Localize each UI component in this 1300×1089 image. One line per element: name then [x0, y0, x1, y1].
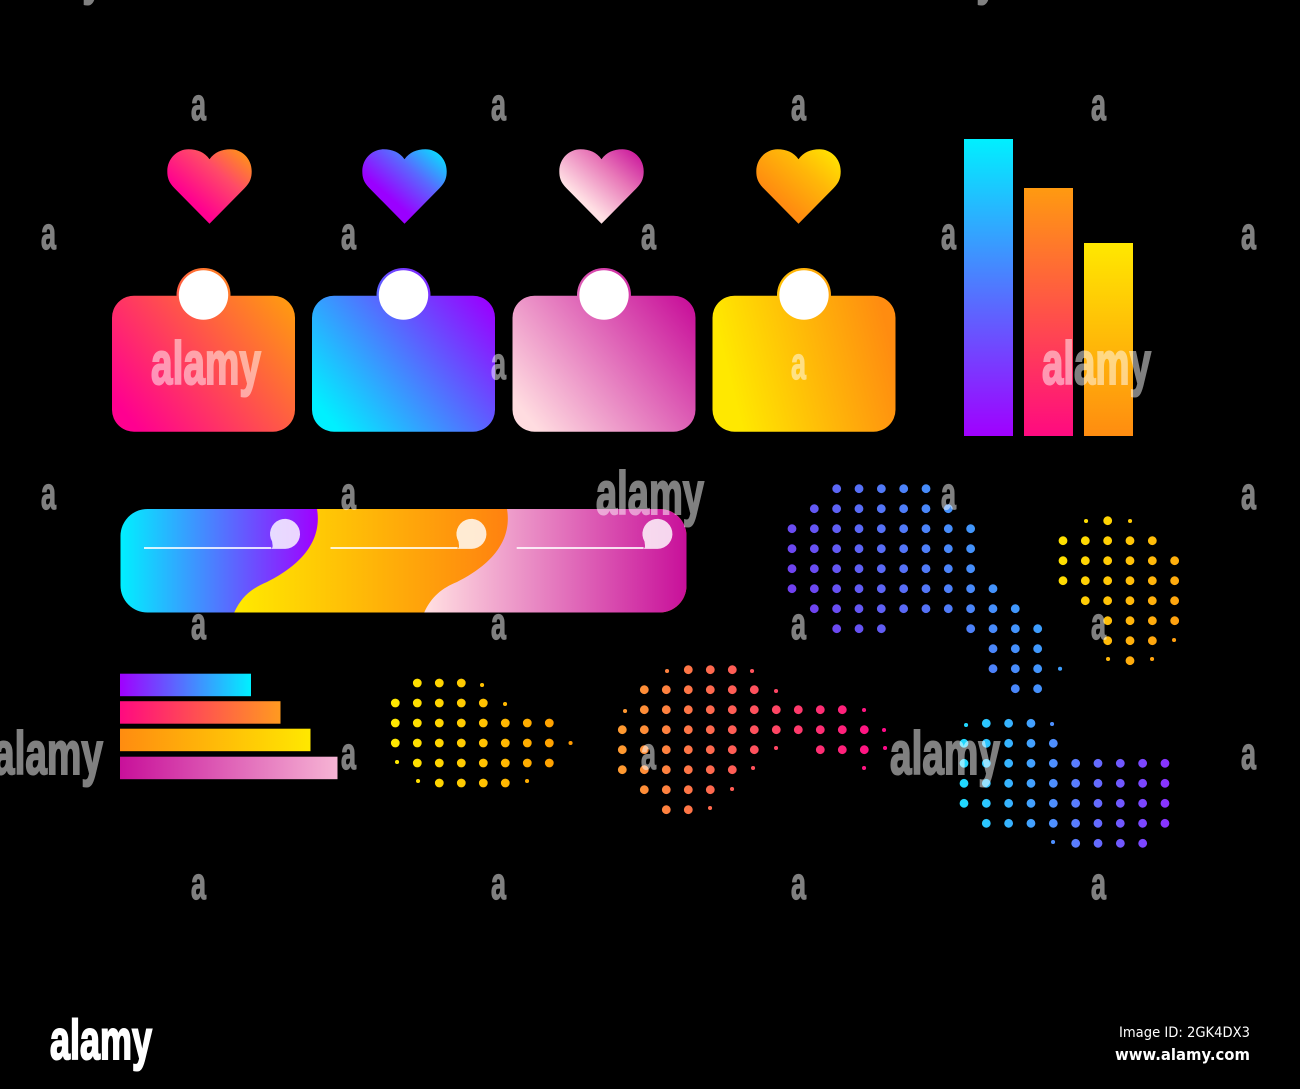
card: yellow-orange — [712, 268, 896, 432]
watermarks: a — [341, 468, 357, 519]
watermarks: a — [1241, 208, 1257, 259]
logo: alamy: alamy — [50, 1008, 152, 1071]
watermarks: a — [1241, 468, 1257, 519]
watermarks: a — [1241, 728, 1257, 779]
watermarks: a — [191, 858, 207, 909]
hearts row — [167, 149, 841, 224]
icon: heart violet-cyan — [362, 149, 447, 224]
watermarks: a — [41, 468, 57, 519]
card: pale pink-magenta — [512, 268, 696, 432]
watermarks: a — [491, 858, 507, 909]
watermarks: a — [491, 79, 507, 130]
dot cluster: blue upper — [792, 489, 1060, 689]
image id: Image ID: 2GK4DX3 — [1119, 1025, 1250, 1041]
watermarks: a — [341, 208, 357, 259]
watermarks: a — [791, 79, 807, 130]
watermarks: a — [41, 208, 57, 259]
watermarks: a — [941, 468, 957, 519]
dot cluster: orange to pink — [622, 670, 885, 810]
watermarks: a — [1091, 79, 1107, 130]
watermarks: a — [941, 208, 957, 259]
watermarks: a — [191, 598, 207, 649]
watermarks: a — [1091, 858, 1107, 909]
vertical bar chart — [964, 139, 1133, 436]
speech marker 1 — [144, 519, 300, 549]
watermarks: a — [791, 858, 807, 909]
watermarks: a — [791, 598, 807, 649]
watermarks: alamy — [151, 330, 261, 397]
icon: heart pale-magenta — [559, 149, 644, 224]
website: www.alamy.com — [1115, 1045, 1250, 1064]
card: cyan-violet — [312, 268, 495, 432]
wave banner — [120, 509, 690, 613]
watermarks: alamy — [1042, 330, 1151, 397]
watermarks: a — [491, 598, 507, 649]
icon: heart pink-orange — [167, 149, 252, 224]
watermarks: a — [641, 208, 657, 259]
watermarks: a — [341, 728, 357, 779]
watermarks: a — [791, 338, 807, 389]
watermarks: alamy — [890, 720, 1000, 787]
speech marker 3 — [517, 519, 672, 549]
speech marker 2 — [330, 519, 486, 549]
watermarks: a — [641, 728, 657, 779]
icon: heart orange-yellow — [756, 149, 841, 224]
cards row — [112, 268, 896, 432]
dot cluster: yellow right — [1063, 521, 1175, 661]
watermarks: a — [491, 338, 507, 389]
card: pink-orange — [112, 268, 295, 432]
dot cluster: yellow left — [395, 683, 571, 783]
horizontal bar chart — [120, 674, 338, 779]
dot cluster: cyan to violet — [964, 723, 1165, 843]
watermarks: a — [1091, 598, 1107, 649]
watermarks: alamy — [596, 460, 704, 527]
watermarks: a — [191, 79, 207, 130]
